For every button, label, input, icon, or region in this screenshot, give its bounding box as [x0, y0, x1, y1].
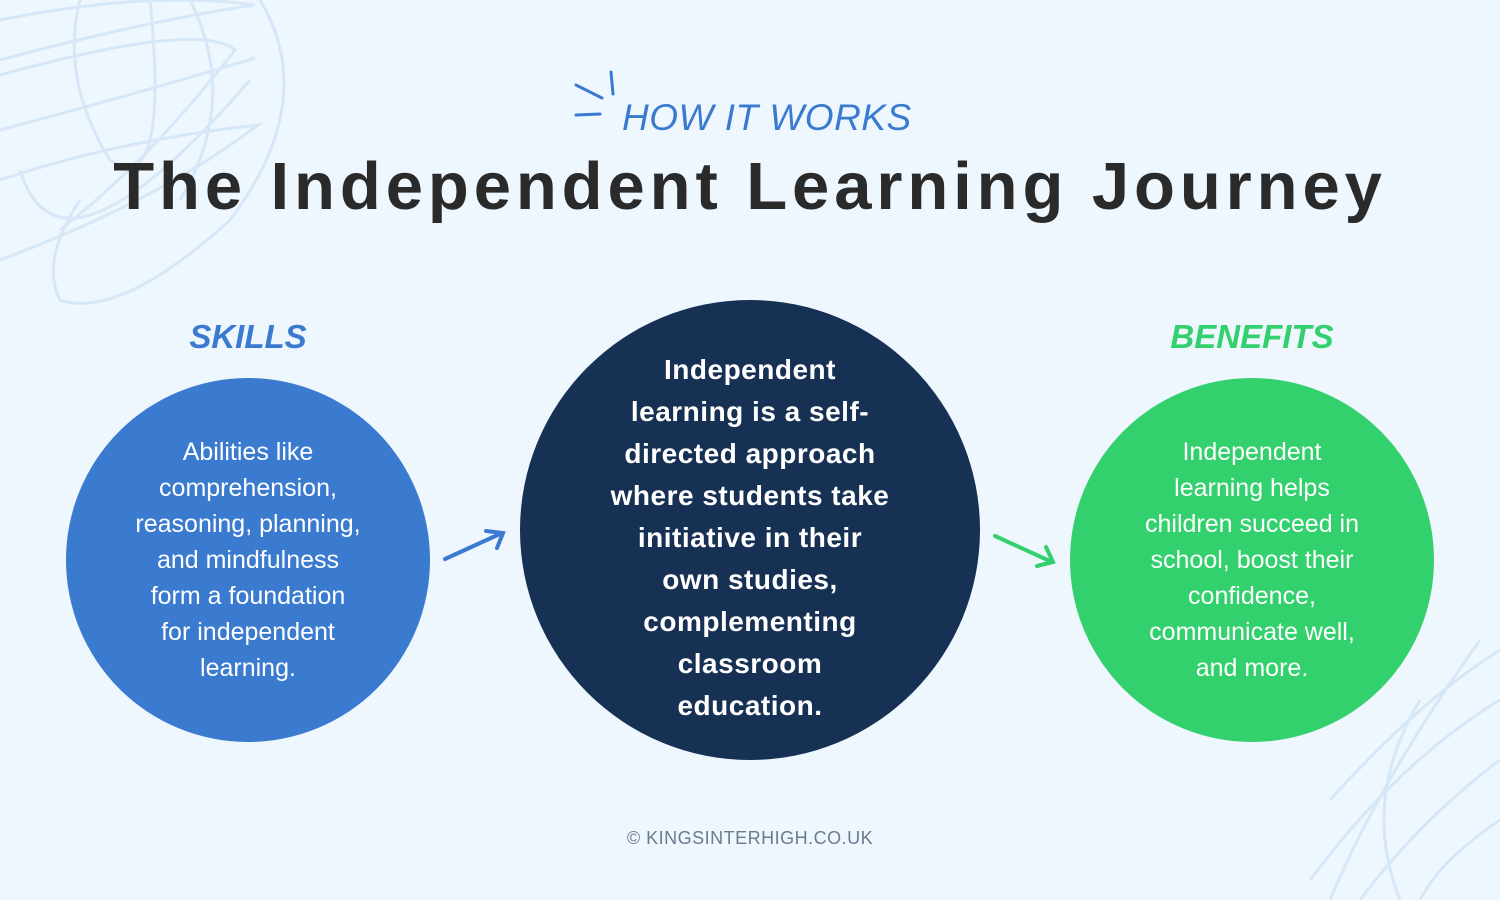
panel: benefits circle: confidence,: [1188, 582, 1316, 610]
panel: benefits circle: [1070, 378, 1434, 742]
panel: central definition circle: education.: [677, 690, 822, 721]
panel: central definition circle: complementing: [643, 606, 857, 637]
panel: benefits circle: learning helps: [1174, 474, 1330, 502]
panel: central definition circle: classroom: [678, 648, 822, 679]
panel: benefits circle: Independent: [1182, 438, 1322, 466]
panel: skills circle: comprehension,: [159, 474, 337, 502]
panel: skills circle: for independent: [161, 618, 335, 646]
panel: skills circle: [66, 378, 430, 742]
subtitle: how it works: HOW IT WORKS: [622, 97, 912, 138]
title: The Independent Learning Journey: [113, 149, 1387, 224]
heading: skills: SKILLS: [189, 318, 307, 355]
subtitle: how it works: [574, 70, 912, 138]
panel: skills circle: reasoning, planning,: [135, 510, 361, 538]
panel: central definition circle: own studies,: [662, 564, 838, 595]
panel: central definition circle: [520, 300, 980, 760]
heading: benefits: BENEFITS: [1170, 318, 1334, 355]
panel: benefits circle: communicate well,: [1149, 618, 1355, 646]
panel: skills circle: learning.: [200, 654, 296, 682]
panel: central definition circle: learning is a self-: [631, 396, 869, 427]
panel: central definition circle: initiative in their: [638, 522, 862, 553]
footer credit: © KINGSINTERHIGH.CO.UK: [627, 828, 873, 848]
arrow: centre to benefits: [992, 534, 1056, 568]
panel: skills circle: and mindfulness: [157, 546, 339, 574]
panel: central definition circle: where students take: [611, 480, 889, 511]
panel: skills circle: Abilities like: [183, 438, 313, 466]
panel: central definition circle: directed approach: [624, 438, 876, 469]
arrow: skills to centre: [442, 529, 506, 562]
panel: benefits circle: school, boost their: [1151, 546, 1353, 574]
panel: benefits circle: and more.: [1196, 654, 1308, 682]
panel: skills circle: form a foundation: [151, 582, 345, 610]
panel: benefits circle: children succeed in: [1145, 510, 1359, 538]
panel: central definition circle: Independent: [664, 354, 836, 385]
